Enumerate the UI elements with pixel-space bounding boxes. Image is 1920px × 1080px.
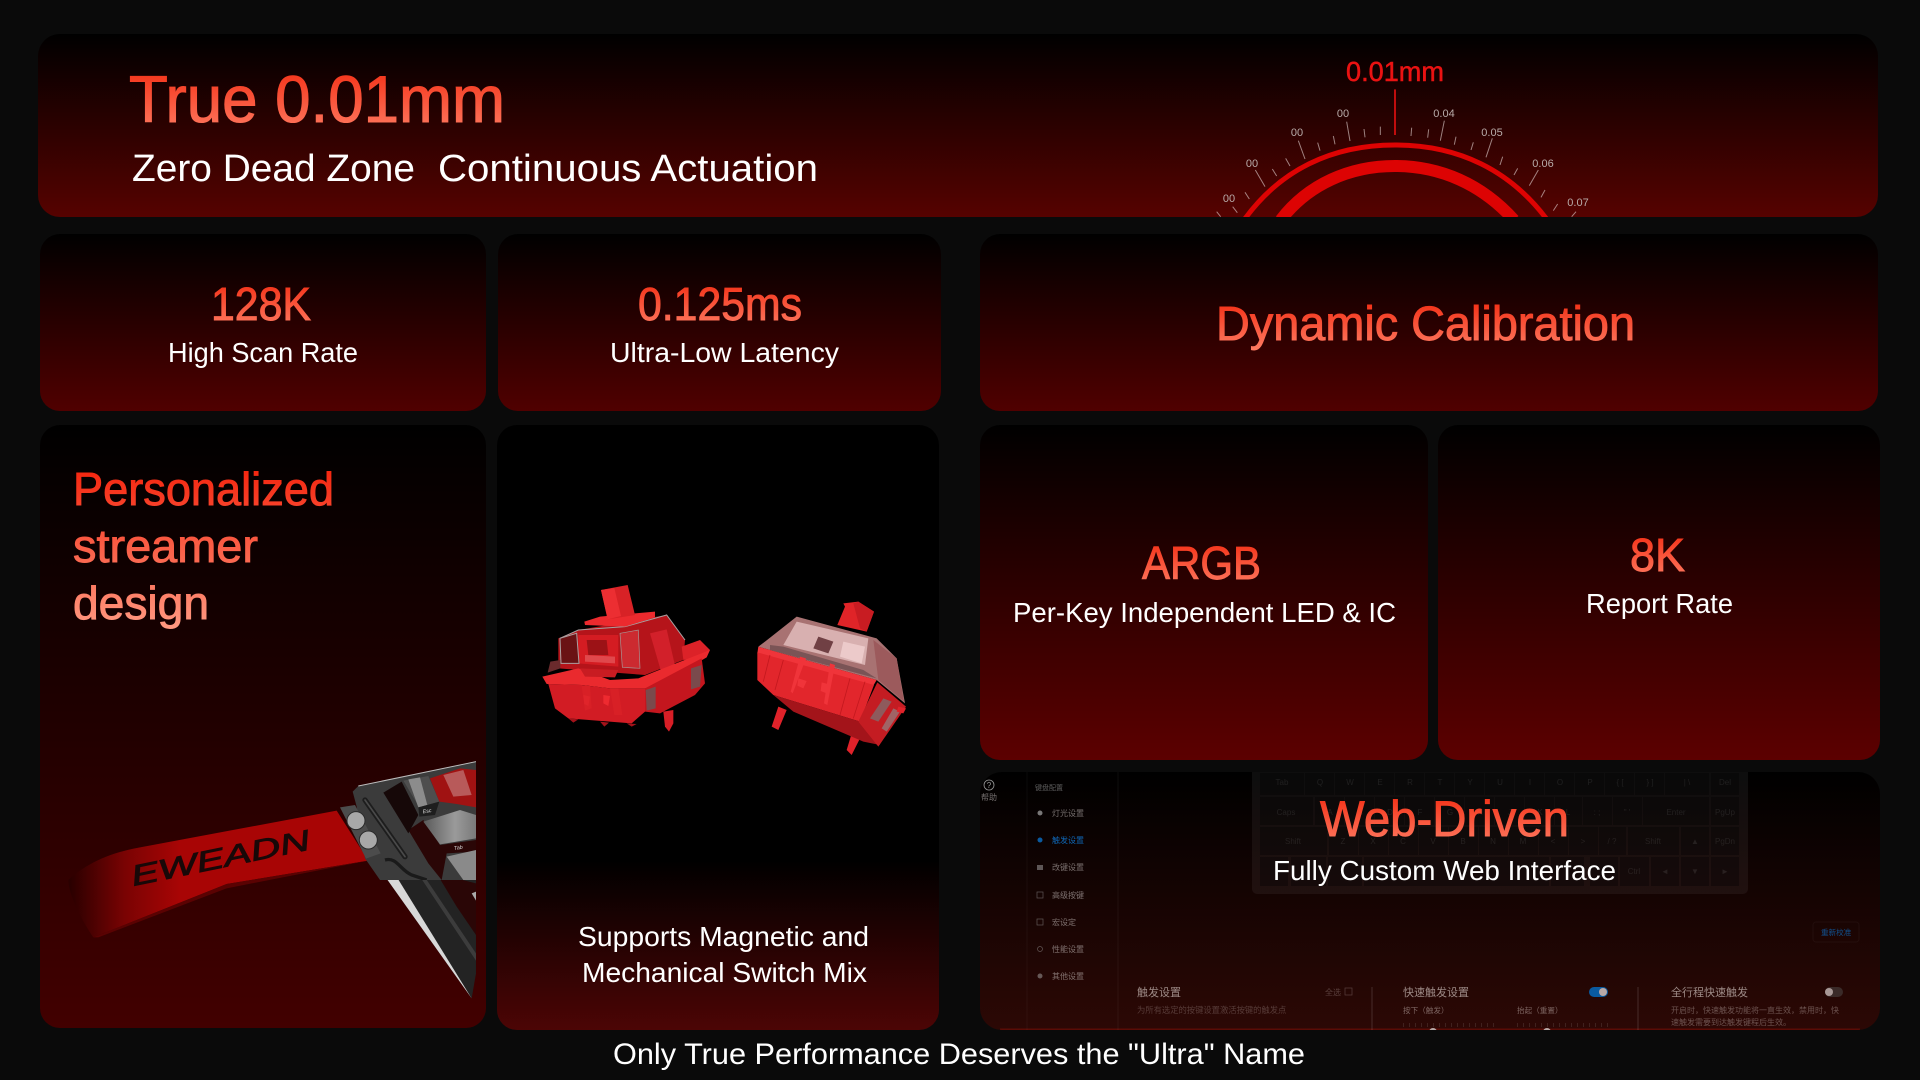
keyboard corner with keycaps — [340, 762, 476, 880]
keyboard layout preview: H — [1477, 808, 1483, 817]
rapid trigger settings block — [1403, 986, 1638, 1030]
keyboard layout preview: J — [1508, 808, 1512, 817]
keyboard layout preview: Caps — [1277, 808, 1295, 817]
trigger settings block: 触发设置 — [1137, 985, 1181, 999]
keyboard layout preview: I — [1529, 778, 1531, 787]
sidebar menu: 其他设置 — [1052, 971, 1084, 981]
chart: actuation gauge dial: 00 — [1291, 127, 1303, 139]
stat: 8K: 8K — [1630, 529, 1685, 581]
stat: 0.125ms: 0.125ms — [638, 278, 802, 330]
keyboard layout preview: > — [1581, 837, 1586, 846]
chart: actuation gauge dial: 0.06 — [1532, 158, 1554, 170]
rapid trigger settings block: 按下（触发） — [1403, 1005, 1449, 1015]
panel: personalized streamer design — [40, 425, 486, 1028]
keyboard layout preview: S — [1357, 808, 1363, 817]
label: report rate: Report Rate — [1586, 588, 1733, 619]
sidebar menu: 触发设置 — [1052, 835, 1084, 845]
keyboard layout preview: | \ — [1684, 778, 1691, 787]
chart: actuation gauge dial: 00 — [1246, 158, 1258, 170]
keyboard layout preview: Q — [1317, 778, 1323, 787]
keyboard layout preview: } ] — [1646, 778, 1654, 787]
full-travel rapid trigger block — [1671, 985, 1843, 1027]
rapid trigger settings block: 抬起（重置） — [1517, 1005, 1563, 1015]
keyboard layout preview: ► — [1721, 867, 1729, 876]
keyboard layout preview: / ? — [1608, 837, 1617, 846]
label: per-key independent LED and IC: Per-Key Independent LED & IC — [1013, 597, 1396, 628]
keyboard layout preview: T — [1438, 778, 1443, 787]
panel: 128K scan rate — [40, 234, 486, 411]
keyboard layout preview: C — [1400, 837, 1406, 846]
label: high scan rate: High Scan Rate — [168, 337, 358, 368]
trigger settings block: 全选 — [1325, 987, 1341, 997]
keyboard layout preview: O — [1557, 778, 1563, 787]
full-travel rapid trigger block: 开启时，快速触发功能将一直生效，禁用时，快 — [1671, 1005, 1839, 1015]
keyboard layout preview: Del — [1719, 778, 1731, 787]
chart: actuation gauge dial: 0.05 — [1481, 127, 1503, 139]
recalibrate button: 重新校准 — [1821, 927, 1852, 937]
keyboard layout preview: E — [1377, 778, 1383, 787]
keyboard layout preview: D — [1387, 808, 1393, 817]
heading: personalized streamer design — [73, 463, 334, 629]
panel: ARGB per-key LED — [980, 425, 1428, 760]
keyboard layout preview: F — [1418, 808, 1423, 817]
sidebar menu: 改键设置 — [1052, 862, 1084, 872]
keyboard layout preview: Tab — [1276, 778, 1289, 787]
chart: actuation gauge dial: 0.01mm — [1346, 56, 1444, 87]
illustration: strap and keyboard — [68, 762, 476, 998]
icon: help — [981, 780, 997, 802]
keyboard corner with keycaps: Tab — [454, 845, 463, 852]
panel: magnetic and mechanical switch mix — [497, 425, 939, 1030]
keyboard layout preview: ◄ — [1661, 867, 1669, 876]
tagline: Only True Performance Deserves the "Ultra" Name — [613, 1038, 1305, 1071]
sidebar menu: 宏设定 — [1052, 917, 1076, 927]
keyboard layout preview: : ; — [1594, 808, 1600, 817]
caption: supports magnetic and mechanical switch mix: Supports Magnetic and — [578, 921, 869, 952]
keyboard layout preview: Shift — [1285, 837, 1302, 846]
chart: actuation gauge dial: 0.04 — [1433, 108, 1455, 120]
heading: dynamic calibration: Dynamic Calibration — [1216, 298, 1635, 351]
keyboard layout preview: K — [1537, 808, 1543, 817]
stat: ARGB: ARGB — [1142, 537, 1261, 589]
keyboard layout preview: V — [1430, 837, 1436, 846]
panel: 0.125ms latency — [498, 234, 941, 411]
keyboard layout preview: N — [1490, 837, 1496, 846]
keyboard layout preview: A — [1327, 808, 1333, 817]
keyboard layout preview: W — [1346, 778, 1354, 787]
keyboard layout preview: PgDn — [1715, 837, 1735, 846]
sidebar menu: 键盘配置 — [1035, 783, 1063, 792]
chart: actuation gauge dial: 00 — [1223, 193, 1235, 205]
keyboard layout preview: { [ — [1616, 778, 1624, 787]
recalibrate button — [1813, 922, 1859, 942]
sidebar menu: 灯光设置 — [1052, 808, 1084, 818]
heading: personalized streamer design: Personalized — [73, 463, 334, 515]
keyboard layout preview: Ctrl — [1628, 867, 1640, 876]
panel: true 0.01mm hero — [38, 34, 1878, 220]
subheading: zero dead zone, continuous actuation: Continuous Actuation — [438, 148, 818, 190]
chart: actuation gauge dial — [1217, 56, 1589, 220]
subheading: zero dead zone, continuous actuation — [132, 148, 818, 190]
keyboard layout preview — [1252, 764, 1748, 894]
panel: dynamic calibration — [980, 234, 1878, 411]
chart: actuation gauge dial: 00 — [1337, 108, 1349, 120]
keyboard layout preview: < — [1551, 837, 1556, 846]
strap — [68, 811, 476, 998]
stat: 128K: 128K — [211, 278, 311, 330]
keyboard layout preview: G — [1447, 808, 1453, 817]
caption: supports magnetic and mechanical switch mix — [578, 921, 869, 988]
keyboard layout preview: L — [1566, 808, 1571, 817]
keyboard layout preview: PgUp — [1715, 808, 1736, 817]
sidebar menu: 性能设置 — [1052, 944, 1084, 954]
heading: web-driven: Web-Driven — [1320, 791, 1569, 847]
icon: red switch, front view — [542, 585, 710, 732]
panel: web-driven interface — [980, 764, 1880, 1036]
label: ultra-low latency: Ultra-Low Latency — [610, 337, 839, 368]
keyboard layout preview: Z — [1341, 837, 1346, 846]
heading: personalized streamer design: design — [73, 577, 209, 629]
icon: help: ? — [987, 781, 992, 790]
rapid trigger settings block: 快速触发设置 — [1403, 985, 1469, 999]
trigger settings block: 为所有选定的按键设置激活按键的触发点 — [1137, 1005, 1286, 1015]
keyboard layout preview: " ' — [1624, 808, 1631, 817]
keyboard layout preview: M — [1520, 837, 1527, 846]
heading: True 0.01mm: True 0.01mm — [129, 62, 505, 136]
panel: 8K report rate — [1438, 425, 1880, 760]
heading: personalized streamer design: streamer — [73, 520, 258, 572]
full-travel rapid trigger block: 速触发需要到达触发键程后生效。 — [1671, 1017, 1791, 1027]
caption: supports magnetic and mechanical switch mix: Mechanical Switch Mix — [582, 957, 867, 988]
trigger settings block — [1137, 985, 1372, 1030]
keyboard layout preview: P — [1587, 778, 1593, 787]
keyboard layout preview: ▼ — [1691, 867, 1699, 876]
keyboard layout preview: U — [1497, 778, 1503, 787]
keyboard layout preview: R — [1407, 778, 1413, 787]
strap: EWEADN — [128, 825, 313, 893]
sidebar menu — [1035, 783, 1084, 981]
keyboard layout preview: Shift — [1645, 837, 1662, 846]
icon: red switch, top view — [757, 602, 906, 755]
screenshot: web configuration interface — [981, 764, 1860, 1036]
keyboard layout preview: X — [1370, 837, 1376, 846]
keyboard layout preview: Y — [1467, 778, 1473, 787]
chart: actuation gauge dial: 0.07 — [1567, 197, 1589, 209]
keyboard layout preview: Enter — [1666, 808, 1686, 817]
keyboard corner with keycaps: Esc — [422, 808, 432, 815]
keyboard layout preview: ▲ — [1691, 837, 1699, 846]
sidebar menu: 高级按键 — [1052, 890, 1084, 900]
subheading: zero dead zone, continuous actuation: Zero Dead Zone — [132, 148, 415, 190]
full-travel rapid trigger block: 全行程快速触发 — [1671, 985, 1748, 999]
label: fully custom web interface: Fully Custom Web Interface — [1273, 855, 1616, 886]
icon: help: 帮助 — [981, 792, 997, 802]
keyboard layout preview: B — [1460, 837, 1466, 846]
